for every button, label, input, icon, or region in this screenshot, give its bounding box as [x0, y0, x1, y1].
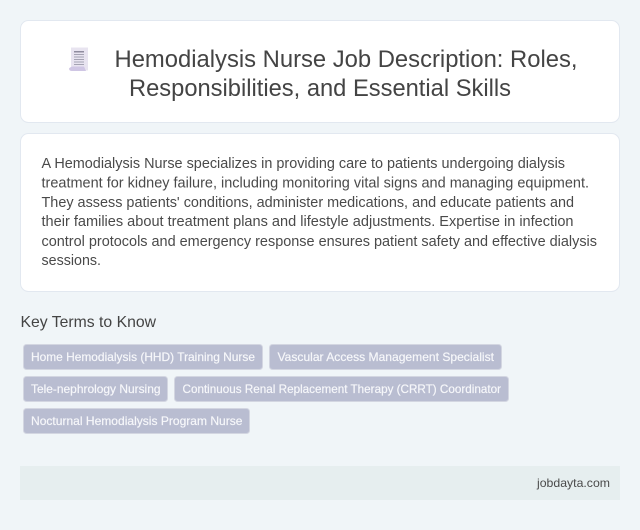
footer source text: jobdayta.com — [536, 476, 610, 490]
chip: home hemodialysis — [24, 344, 262, 370]
footer bar — [20, 466, 620, 500]
description text: control protocols and emergency response ensures patient safety and effective dialysis — [42, 234, 597, 250]
description text — [42, 156, 597, 269]
chip: vascular access: Vascular Access Management Specialist — [278, 350, 495, 364]
description text: A Hemodialysis Nurse specializes in providing care to patients undergoing dialysis — [42, 156, 565, 172]
chip: CRRT coordinator — [174, 376, 508, 402]
heading: key terms: Key Terms to Know — [20, 314, 156, 331]
chip: home hemodialysis: Home Hemodialysis (HHD) Training Nurse — [31, 350, 255, 364]
panel: title header — [20, 20, 620, 122]
title — [114, 46, 578, 102]
description text: treatment for kidney failure, including monitoring vital signs and managing equipment. — [42, 176, 589, 192]
description text: their families about treatment plans and lifestyle adjustments. Expertise in infection — [42, 214, 574, 230]
chip: tele-nephrology — [24, 376, 168, 402]
chip: tele-nephrology: Tele-nephrology Nursing — [31, 382, 160, 396]
description text: sessions. — [42, 253, 101, 269]
panel: key term chips — [24, 344, 508, 434]
chip: nocturnal hemodialysis — [24, 408, 250, 434]
chip: CRRT coordinator: Continuous Renal Replacement Therapy (CRRT) Coordinator — [182, 382, 501, 396]
icon: document scroll — [69, 48, 88, 71]
chip: vascular access — [270, 344, 502, 370]
title: Responsibilities, and Essential Skills — [129, 75, 511, 102]
description text: They assess patients' conditions, administer medications, and educate patients and — [42, 195, 574, 211]
chip: nocturnal hemodialysis: Nocturnal Hemodialysis Program Nurse — [31, 414, 243, 428]
title: Hemodialysis Nurse Job Description: Roles, — [114, 46, 578, 73]
panel: description — [20, 134, 620, 292]
